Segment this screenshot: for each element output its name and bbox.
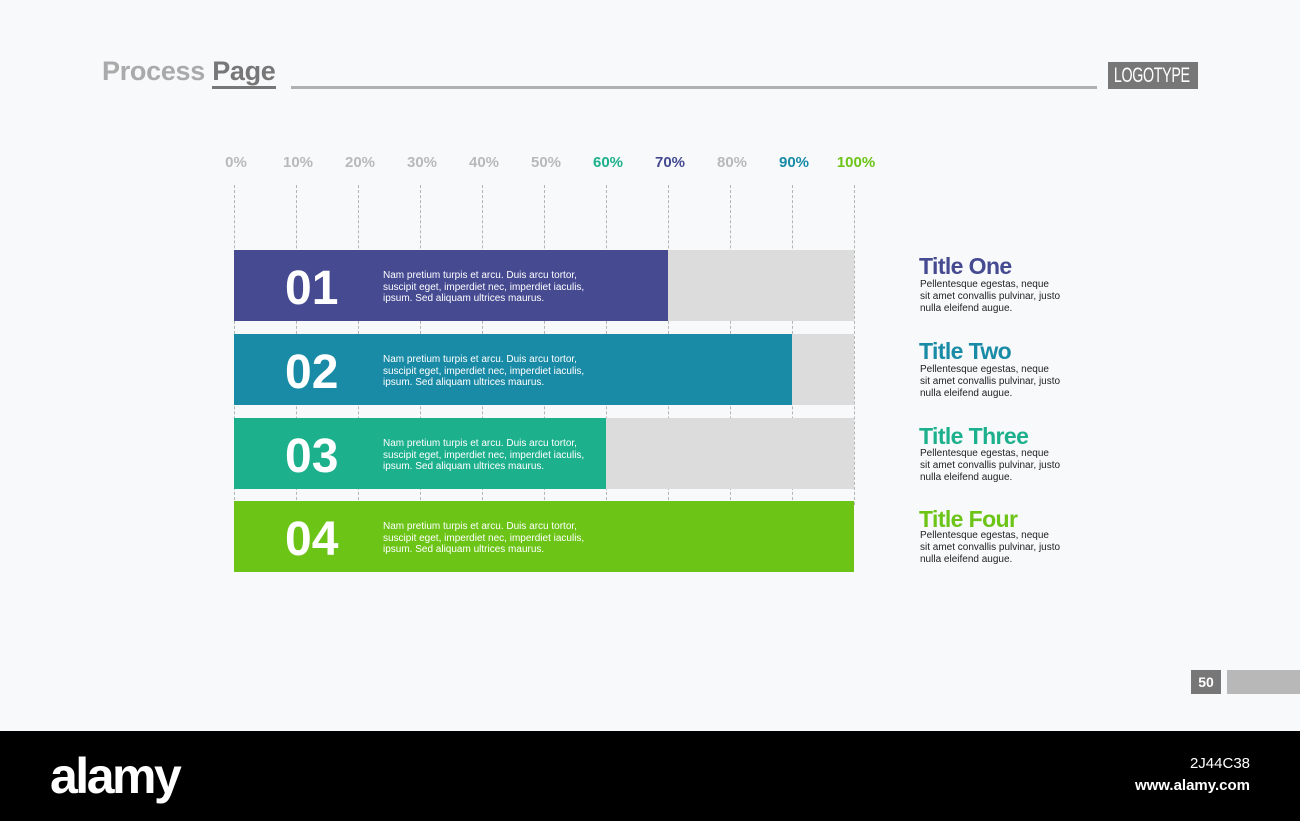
page number: 50	[1198, 674, 1214, 690]
bar 01: Nam pretium turpis et arcu. Duis arcu tortor,	[383, 270, 577, 281]
legend: sit amet convallis pulvinar, justo	[920, 460, 1060, 471]
legend: Title Four	[919, 506, 1017, 532]
bar 01: suscipit eget, imperdiet nec, imperdiet iaculis,	[383, 282, 584, 293]
axis labels: 10%	[283, 154, 313, 171]
footer	[0, 731, 1300, 821]
axis labels: 80%	[717, 154, 747, 171]
bar 01: ipsum. Sed aliquam ultrices maurus.	[383, 293, 544, 304]
legend: nulla eleifend augue.	[920, 388, 1012, 399]
legend: nulla eleifend augue.	[920, 303, 1012, 314]
bar 03	[234, 418, 606, 489]
bar 03: Nam pretium turpis et arcu. Duis arcu tortor,	[383, 438, 577, 449]
legend: Pellentesque egestas, neque	[920, 448, 1049, 459]
bar 03: ipsum. Sed aliquam ultrices maurus.	[383, 461, 544, 472]
legend: sit amet convallis pulvinar, justo	[920, 376, 1060, 387]
footer: 2J44C38	[1190, 755, 1250, 772]
bar 02	[234, 334, 792, 405]
logo: LOGOTYPE	[1114, 64, 1190, 87]
axis labels: 50%	[531, 154, 561, 171]
axis labels	[225, 154, 875, 171]
bar 04: ipsum. Sed aliquam ultrices maurus.	[383, 544, 544, 555]
axis labels: 70%	[655, 154, 685, 171]
legend: nulla eleifend augue.	[920, 472, 1012, 483]
legend: nulla eleifend augue.	[920, 554, 1012, 565]
legend	[919, 253, 1060, 565]
bar 03: suscipit eget, imperdiet nec, imperdiet iaculis,	[383, 450, 584, 461]
bar 02: ipsum. Sed aliquam ultrices maurus.	[383, 377, 544, 388]
legend: Title One	[919, 253, 1012, 279]
axis labels: 0%	[225, 154, 247, 171]
grid	[234, 185, 235, 505]
bar 03: 03	[285, 430, 338, 483]
legend: Pellentesque egestas, neque	[920, 279, 1049, 290]
axis labels: 40%	[469, 154, 499, 171]
bar 02: suscipit eget, imperdiet nec, imperdiet iaculis,	[383, 366, 584, 377]
footer: alamy	[50, 748, 179, 804]
bar 04: suscipit eget, imperdiet nec, imperdiet iaculis,	[383, 533, 584, 544]
footer: www.alamy.com	[1135, 777, 1250, 794]
bar 04	[234, 501, 854, 572]
legend: sit amet convallis pulvinar, justo	[920, 542, 1060, 553]
bar 01: 01	[285, 262, 338, 315]
bar 02: 02	[285, 346, 338, 399]
bar 01	[234, 250, 668, 321]
bar 02: Nam pretium turpis et arcu. Duis arcu tortor,	[383, 354, 577, 365]
title: Process Page	[102, 56, 276, 86]
bar 04: 04	[285, 513, 338, 566]
legend: sit amet convallis pulvinar, justo	[920, 291, 1060, 302]
legend: Pellentesque egestas, neque	[920, 364, 1049, 375]
axis labels: 90%	[779, 154, 809, 171]
bar 04: Nam pretium turpis et arcu. Duis arcu tortor,	[383, 521, 577, 532]
legend: Title Three	[919, 423, 1028, 449]
legend: Title Two	[919, 338, 1011, 364]
legend: Pellentesque egestas, neque	[920, 530, 1049, 541]
tracks	[234, 250, 854, 321]
header rule	[291, 86, 1097, 89]
axis labels: 60%	[593, 154, 623, 171]
axis labels: 100%	[837, 154, 875, 171]
axis labels: 20%	[345, 154, 375, 171]
axis labels: 30%	[407, 154, 437, 171]
page number	[1191, 670, 1221, 694]
